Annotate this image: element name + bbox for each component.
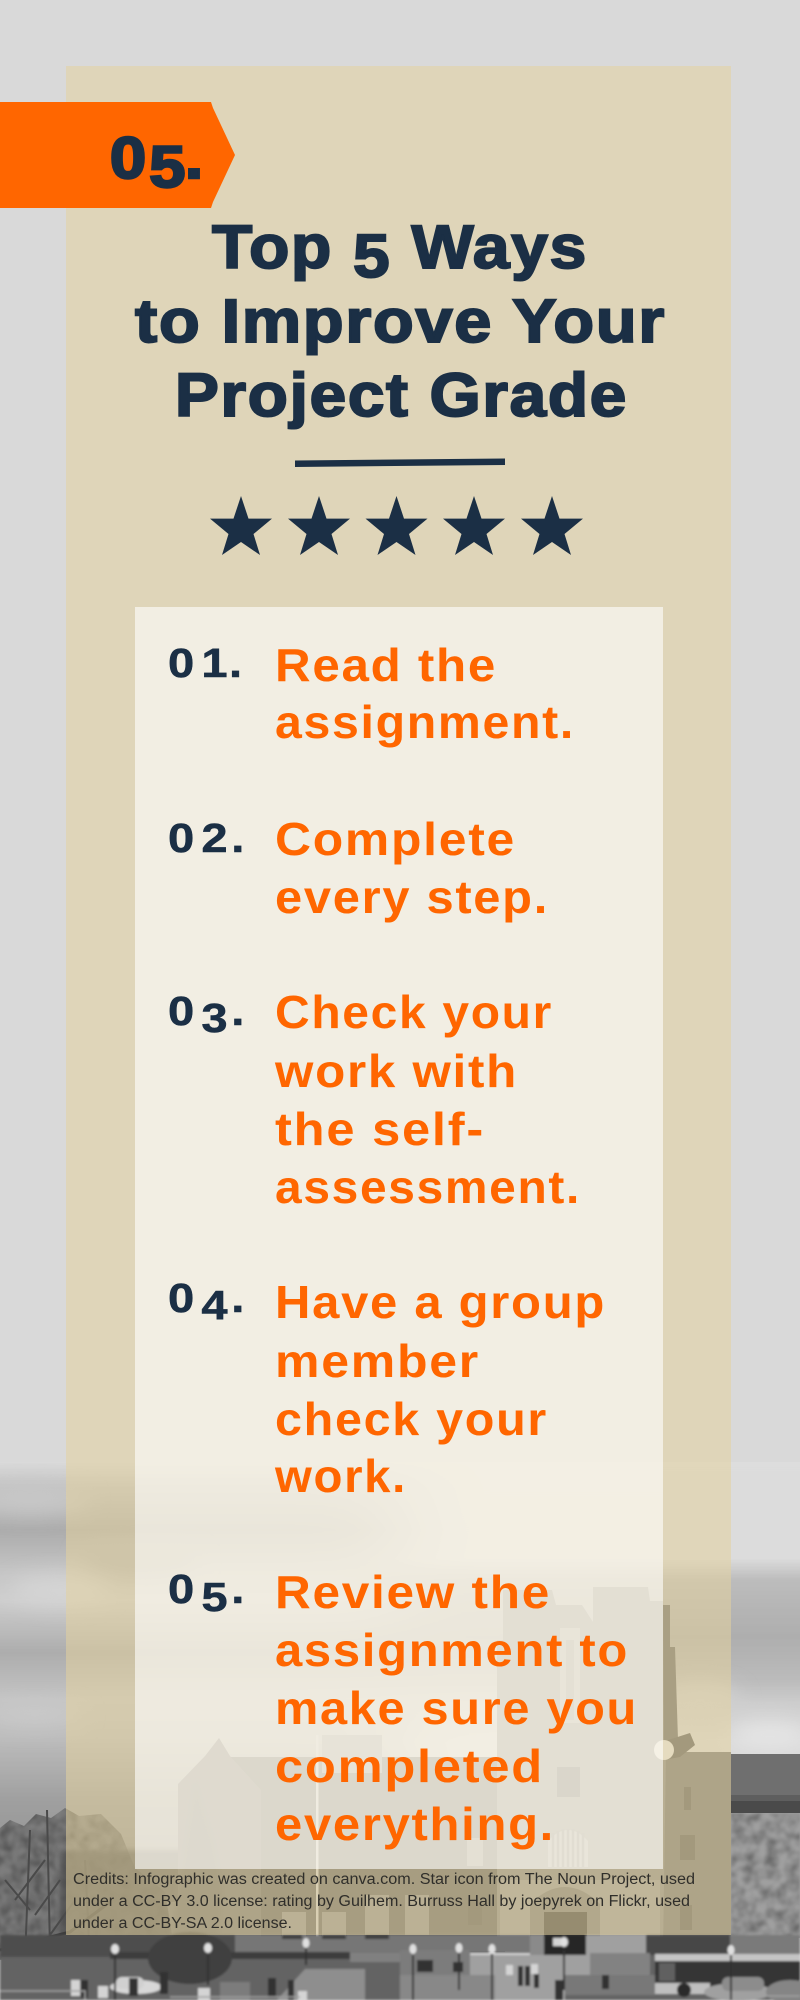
lawn bbox=[0, 1955, 800, 2000]
right wing bbox=[640, 1752, 731, 1952]
door arch bbox=[530, 1887, 600, 1950]
list item 02: Complete bbox=[275, 813, 516, 865]
list item 02: 02. bbox=[168, 816, 244, 861]
tower lower piers bbox=[500, 1880, 660, 1950]
list item 03: work with bbox=[274, 1045, 518, 1097]
ribbon shape bbox=[0, 102, 235, 208]
clock cap bbox=[662, 1733, 695, 1760]
list item 04: Have a group bbox=[275, 1276, 606, 1328]
list item 03: the self- bbox=[275, 1103, 485, 1155]
people bbox=[71, 1938, 609, 2000]
towers bbox=[497, 1587, 666, 1950]
divider line bbox=[295, 458, 505, 467]
trees at left bbox=[0, 1808, 240, 1960]
credits text: Credits: Infographic was created on canva.com. Star icon from The Noun Project, used bbox=[73, 1871, 695, 1888]
photo: Burruss Hall campus scene bbox=[0, 1462, 800, 2000]
star rating bbox=[210, 496, 583, 555]
title: Top 5 Ways bbox=[212, 213, 588, 290]
panel: list background bbox=[135, 607, 663, 1869]
windows at base bbox=[282, 1935, 389, 1939]
list item 04: member bbox=[275, 1335, 480, 1387]
cars bbox=[704, 1983, 772, 2000]
clock face bbox=[654, 1740, 674, 1760]
ribbon badge bbox=[0, 102, 235, 208]
credits text: under a CC-BY 3.0 license: rating by Guilhem. Burruss Hall by joepyrek on Flickr, used bbox=[73, 1893, 690, 1910]
fence bbox=[0, 1991, 800, 2000]
ribbon number: 05. bbox=[110, 126, 203, 200]
list item 05: assignment to bbox=[275, 1624, 629, 1676]
planter bbox=[220, 1982, 250, 2000]
photo sky bbox=[0, 1462, 800, 1902]
list item 01: 01. bbox=[168, 641, 242, 686]
left turret bbox=[178, 1738, 261, 1950]
list item 02 bbox=[168, 813, 549, 923]
list item 01: assignment. bbox=[275, 696, 575, 748]
list item 01: Read the bbox=[275, 639, 497, 691]
clouds bbox=[0, 1488, 800, 1747]
arched window bbox=[548, 1830, 588, 1867]
tree in front of turret bbox=[168, 1780, 223, 1950]
credits text bbox=[73, 1871, 695, 1932]
list item 04 bbox=[168, 1276, 606, 1502]
title: Project Grade bbox=[175, 361, 628, 429]
credits text: under a CC-BY-SA 2.0 license. bbox=[73, 1915, 292, 1932]
building: main hall bbox=[178, 1587, 731, 1955]
list item 02: every step. bbox=[275, 871, 549, 923]
stone wall bbox=[277, 1969, 365, 2000]
list item 04: work. bbox=[274, 1450, 407, 1502]
tower central slit bbox=[560, 1628, 580, 1723]
title bbox=[135, 213, 666, 429]
list item 05: 05. bbox=[168, 1567, 244, 1620]
bus bbox=[655, 1954, 800, 1997]
windows bbox=[282, 1838, 483, 1946]
list item 03: assessment. bbox=[275, 1161, 581, 1213]
list item 04: 04. bbox=[168, 1276, 244, 1328]
panel: tan background bbox=[66, 66, 731, 1935]
list item 03 bbox=[168, 986, 581, 1213]
flag bbox=[322, 1735, 382, 1773]
foreground ground bbox=[0, 1932, 800, 2000]
list item 05: everything. bbox=[275, 1798, 555, 1850]
list item 03: Check your bbox=[275, 986, 553, 1038]
list item 05: make sure you bbox=[275, 1682, 638, 1734]
left wing bbox=[205, 1757, 505, 1952]
list item 05: completed bbox=[275, 1740, 544, 1792]
building base centre bbox=[400, 1935, 530, 1953]
list item 05: Review the bbox=[275, 1566, 551, 1618]
lamp posts bbox=[111, 1937, 734, 2000]
steps bbox=[470, 1955, 590, 2000]
list item 01 bbox=[168, 639, 575, 748]
bush bbox=[148, 1932, 232, 1984]
tower shadow side bbox=[663, 1605, 678, 1750]
list item 03: 03. bbox=[168, 989, 244, 1041]
title: to Improve Your bbox=[135, 287, 666, 355]
list item 04: check your bbox=[275, 1393, 548, 1445]
list item 05 bbox=[168, 1566, 638, 1850]
trees behind right wing bbox=[731, 1754, 800, 1938]
